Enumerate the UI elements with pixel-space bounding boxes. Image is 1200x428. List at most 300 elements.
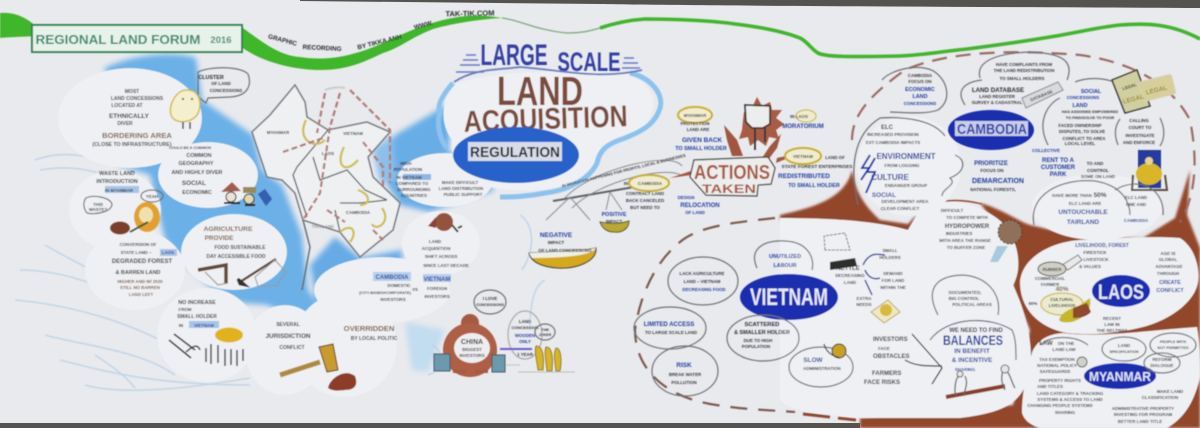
text: hydropower competition: TO BUFFER ZONE	[947, 245, 985, 250]
credit line: TAK-TIK.COM	[445, 9, 495, 18]
text: land reform notes: INVESTING FOR PROGRAM	[1114, 412, 1172, 417]
bubble: land database: DATABASE	[1029, 89, 1053, 102]
panel: laos	[1020, 237, 1198, 334]
icon: yellow figures: THE	[541, 327, 549, 332]
green header ribbon	[0, 13, 1200, 70]
icon: nettle kettle and forest: NEEDS	[856, 302, 872, 307]
text: cambodia domestic versus vietnam foreign investors: CAMBODIA	[376, 275, 409, 281]
icon: nettle kettle and forest: EXTRA	[857, 296, 872, 301]
bubble: documented political: POLITICAL AREAS	[952, 302, 992, 307]
text: concessions location: MOST	[125, 89, 139, 95]
text: create conflict: ADVANTAGE	[1155, 264, 1183, 269]
bubble: balances in benefit and incentive sharing: IN BENEFIT	[954, 348, 990, 355]
credit line: RECORDING	[302, 44, 342, 53]
bubble: complaints from land redistribution: TO SMALL HOLDERS	[1000, 76, 1045, 81]
text: cambodia domestic versus vietnam foreign investors: (CITY-BASED/CORPORATE)	[359, 290, 412, 295]
bubble: lack agriculture land: LACK AGRICULTURE	[680, 271, 725, 276]
title banner: regional land forum 2016	[32, 25, 242, 52]
icon: nettle kettle and forest: SMALL	[882, 248, 898, 253]
bubble: environment culture social impacts: INCREASED PROVISION	[867, 132, 919, 137]
bubble: scattered smallholder: SCATTERED	[744, 322, 780, 328]
text: concessions location: LAND CONCESSIONS	[111, 96, 164, 102]
icon: legal book and scroll: LEGAL	[1122, 93, 1145, 106]
text: high population in vietnam: IN VIETNAM	[396, 175, 422, 180]
bubble: limited access: LIMITED ACCESS	[644, 322, 694, 328]
bubble: environment culture social impacts: FROM LOGGING	[885, 163, 920, 168]
note: vietnam: VIETNAM	[793, 154, 813, 159]
note: myanmar: LAND ARE	[687, 127, 709, 132]
text: high population in vietnam	[394, 161, 483, 198]
text: livelihood list: 60%	[1029, 301, 1037, 306]
text: cambodia domestic versus vietnam foreign investors: DOMESTIC	[387, 283, 411, 288]
map: myanmar laos vietnam cambodia: VIETNAM	[343, 131, 363, 136]
callout: land concession wooden: LAND	[519, 319, 531, 324]
bubble: documented political: DOCUMENTED,	[949, 290, 981, 295]
bubble: land law: ON THE	[1058, 341, 1074, 346]
note: cambodia: BUT NEED TO	[630, 205, 660, 210]
bubble: more than 50 percent untouchable: HAVE MORE THAN	[1052, 193, 1092, 198]
text: land reform notes: SHARING	[1055, 410, 1076, 415]
panel: myanmar	[1022, 316, 1200, 428]
bubble: scattered smallholder: POPULATION	[742, 344, 770, 349]
callout: land concession wooden: WOODEN	[515, 333, 535, 338]
note: cambodia: BACK CANCELED	[626, 198, 664, 203]
note: myanmar: MYANMAR	[684, 113, 707, 118]
text: livelihood list: & VALUES	[1079, 264, 1101, 269]
heading: acquisition: ACQUISITION	[463, 100, 628, 139]
text: land reform notes	[1027, 389, 1183, 424]
text: cambodia domestic versus vietnam foreign investors: FOREIGN	[427, 286, 447, 291]
bubble: risk: POLLUTION	[671, 380, 697, 385]
text: land reform notes: MAKE LAND	[1157, 389, 1183, 394]
icon: legal book and scroll	[1112, 70, 1176, 113]
bubble: more than 50 percent untouchable: ELC LAND	[1125, 195, 1147, 200]
heading: large scale	[454, 39, 642, 82]
text: conversion of state land	[112, 242, 177, 297]
text: several jurisdiction: CONFLICT	[279, 345, 305, 351]
heading: large scale: LARGE	[480, 39, 548, 72]
bubble: land law: SAFEGUARDS	[1040, 369, 1070, 374]
bubble: more than 50 percent untouchable: ONE AND	[1126, 202, 1146, 207]
callout: land concession wooden: ONLY	[519, 339, 531, 344]
text: cambodia domestic versus vietnam foreign investors: INVESTORS	[380, 297, 406, 302]
negative impact pan: OF LAND CONCESSIONS	[538, 248, 592, 253]
text: cambodia domestic versus vietnam foreign investors: VS	[412, 287, 418, 292]
text: land reform notes: CLASSIFICATION	[1142, 395, 1178, 400]
note: cambodia: CONTRACT LAND	[626, 191, 664, 196]
text: land reform notes: LAND CATEGORY & TRACKING	[1037, 391, 1104, 396]
note: laos: MORATORIUM	[782, 124, 824, 130]
bubble: environment culture social impacts: DEVELOPMENT AREA	[882, 199, 929, 204]
bubble: slow administration: ADMINISTRATION	[803, 366, 841, 371]
callout: land concession wooden: 1 YEAR	[517, 352, 534, 357]
bubble: social land concessions: TO FIND/SOLVE TO POOR	[1066, 115, 1114, 120]
icon: yellow figures: JOKER	[539, 333, 552, 337]
balance scale: negative vs positive impact	[529, 153, 686, 268]
map: myanmar laos vietnam cambodia: MYANMAR	[267, 130, 290, 135]
callout: cluster of land concessions	[198, 68, 249, 103]
icon: food bowl: LIVELIHOOD	[1049, 303, 1075, 308]
text: land reform notes: BETTER LAND TITLE	[1118, 419, 1162, 424]
note: laos: IN LAOS	[790, 114, 808, 119]
note: vietnam	[778, 148, 853, 189]
text: cambodia domestic versus vietnam foreign investors: INVESTORS	[424, 294, 450, 299]
bubble: economic land concessions: FOCUS ON	[908, 79, 932, 84]
badge: vietnam: VIETNAM	[750, 284, 828, 311]
bubble: land database: LAND DATABASE	[972, 87, 1024, 94]
positive impact pan	[600, 212, 629, 232]
bubble: balances in benefit and incentive sharing	[930, 321, 1016, 397]
icon: figure at desk	[1132, 150, 1167, 190]
text and icon: no increase for smallholders: VIETNAM	[194, 323, 214, 328]
white idea bubbles over blue wash	[58, 68, 653, 397]
text: conversion of state land: & BARREN LAND	[116, 270, 161, 276]
bubble: more than 50 percent untouchable: ELC LAND ARE	[1069, 201, 1101, 206]
text: investors and farmers: FACE RISKS	[864, 380, 900, 386]
text: prioritize demarcation	[970, 161, 1024, 192]
text: conversion of state land: DEGRADED FOREST	[112, 259, 172, 265]
map: myanmar laos vietnam cambodia: THAILAND	[312, 224, 334, 229]
icon: nettle kettle and forest	[824, 233, 906, 323]
text: concessions location	[92, 89, 172, 148]
text: livelihood list: COMMERCIAL	[1035, 276, 1065, 281]
bubble: land law: PROPERTY RIGHTS	[1039, 378, 1081, 383]
callout: land concession wooden: CONCESSION	[512, 325, 539, 330]
title banner: regional land forum 2016: REGIONAL LAND FORUM	[36, 32, 201, 47]
text: prioritize demarcation: NATIONAL FORESTS,	[970, 187, 1016, 192]
text: create conflict: CONFLICT	[1156, 288, 1184, 294]
text: high population in vietnam: MAKE DIFFICULT	[442, 180, 479, 185]
bubble: unutilized labour: UNUTILIZED	[769, 254, 801, 260]
bubble: unutilized labour: LABOUR	[773, 263, 797, 269]
text: rent to a customer park: PARK	[1050, 172, 1067, 178]
text and icon: agriculture	[198, 226, 286, 286]
note: vietnam: TO SMALL HOLDER	[788, 183, 840, 189]
bubble: social land concessions: HAS ASSIGNED EMPOWERED	[1062, 109, 1118, 114]
text: concessions location: LOCATED AT	[111, 103, 143, 109]
text: create conflict: GLOBAL	[1159, 257, 1178, 262]
bubble: social land concessions: LAND	[1073, 103, 1088, 109]
icon: china figure: INVESTORS	[459, 353, 485, 358]
bubble: people with no land: PEOPLE WITH	[1160, 340, 1186, 344]
icon: legal book and scroll: LEGAL	[1122, 82, 1138, 91]
bubble: people with no land: NOT PERMITTED	[1157, 346, 1189, 350]
text: conversion of state land: CONVERSION OF	[120, 242, 157, 247]
bubble: environment culture social impacts: ENVIRONMENT	[876, 152, 936, 161]
text: concessions location: BORDERING AREA	[102, 131, 172, 140]
callout: land concession wooden	[500, 311, 542, 359]
title banner: regional land forum 2016: 2016	[210, 35, 232, 46]
text: livelihood list: FIRESTICK	[1083, 250, 1107, 255]
map: myanmar laos vietnam cambodia: LAOS	[322, 151, 334, 156]
map: myanmar laos vietnam cambodia: CAMBODIA	[346, 210, 371, 215]
text: rent to a customer park: CONTROL	[1087, 168, 1109, 173]
bubble: economic land concessions	[882, 67, 947, 113]
bubble: environment culture social impacts: ELC	[881, 125, 894, 131]
bubble: more than 50 percent untouchable	[1033, 181, 1163, 226]
text: rent to a customer park: SOME ON LAND	[1081, 174, 1115, 179]
text: concessions location: (CLOSE TO INFRASTRUCTURE)	[92, 142, 172, 148]
bubble: risk	[652, 346, 718, 396]
bubble: land specification: LAND	[1118, 343, 1130, 348]
bubble: land law: LAND LAW	[1052, 347, 1076, 352]
text and icon: land acquisition shift: SINCE LAST DECADE	[423, 263, 469, 268]
balance scale: negative vs positive impact: IN MIGRATION HAPPENING FOR PROFITS, LOCAL & BUSINESSES	[561, 153, 686, 188]
text and icon: no increase for smallholders: IN	[179, 323, 183, 328]
text: high population in vietnam: PUBLIC SUPPORT	[444, 192, 483, 197]
badge: myanmar: MYANMAR	[1089, 369, 1152, 384]
text and icon: land acquisition shift: LAND	[429, 239, 441, 244]
bubble: people with no land: REFORM	[1152, 357, 1172, 362]
text: waste land: WASTE?	[89, 207, 107, 212]
actions taken hub	[624, 97, 853, 215]
icon: nettle kettle and forest: DEMAND	[883, 271, 903, 276]
text: several jurisdiction: SEVERAL	[276, 322, 300, 328]
note: vietnam: STATE FOREST ENTERPRISES	[782, 164, 853, 170]
text and icon: agriculture: FOOD SUSTAINABLE	[214, 245, 266, 251]
note: cambodia: DESIGN	[678, 195, 694, 200]
bubble: calling court	[1115, 118, 1164, 146]
text: hydropower competition: INDUSTRIES	[946, 231, 972, 236]
text: create conflict: THROUGH	[1157, 271, 1179, 276]
text: rent to a customer park: CUSTOMER	[1041, 165, 1076, 171]
text: livelihood list: RUBBER	[1043, 267, 1062, 272]
bubble: environment culture social impacts	[854, 118, 963, 211]
bubble: social land concessions: SOCIAL	[1081, 89, 1102, 95]
bubble: limited access: TO LARGE SCALE LAND	[645, 330, 697, 335]
bubble: social land concessions	[1043, 79, 1122, 146]
bubble: lack agriculture land: DECREASING FOOD	[682, 287, 726, 292]
bubble: economic land concessions: ECONOMIC	[905, 87, 935, 93]
icon: yellow figures	[518, 324, 575, 372]
text: recent law: THE BELTWAY	[1097, 328, 1127, 333]
badge: regulation: REGULATION	[470, 144, 560, 161]
text: livelihood list: LIVESTOCK	[1083, 257, 1109, 262]
icon: nettle kettle and forest: NETTLE	[836, 266, 860, 272]
text and icon: land acquisition shift	[422, 213, 469, 268]
text: land reform notes: CHANGING PEOPLE SYSTEMS	[1027, 403, 1093, 408]
callout: cluster of land concessions: CONCESSIONS	[210, 88, 242, 93]
title halo	[438, 73, 661, 197]
note: cambodia: RELOCATION	[680, 203, 720, 209]
brown wash behind country panels	[780, 170, 1200, 428]
bubble: environment culture social impacts: ENDANGER GROUP	[885, 183, 927, 188]
bubble: calling court: COURT TO	[1129, 125, 1152, 130]
negative impact pan: IMPACT	[548, 240, 565, 245]
bubble: scattered smallholder: DUE TO HIGH	[744, 338, 772, 343]
bubble: social land concessions: FACED OWNERSHIP	[1058, 123, 1102, 128]
bubble: complaints from land redistribution	[979, 52, 1069, 81]
text: waste land: WASTE LAND	[99, 171, 135, 177]
bubble: scattered smallholder	[727, 315, 799, 361]
text: prioritize demarcation: FOCUS ON	[980, 168, 1004, 173]
bubble: limited access	[634, 307, 706, 349]
text: several jurisdiction: JURISDICTION	[265, 333, 311, 340]
badge: cambodia	[948, 110, 1034, 150]
positive impact pan: IMPACT	[606, 219, 623, 224]
text: investors and farmers	[864, 334, 942, 386]
text: recent law: LAW IN	[1104, 322, 1120, 327]
icon: nettle kettle and forest: WITHIN THE	[880, 285, 906, 290]
bubble: lack agriculture land: LAND – VIETNAM	[684, 279, 721, 284]
bubble: risk: BREAK WATER	[669, 372, 702, 377]
text: hydropower competition: HYDROPOWER	[945, 224, 990, 230]
bubble: land law: NATIONAL POLICY	[1037, 363, 1077, 368]
note: cambodia: IN	[624, 181, 628, 186]
bubble: scattered smallholder: & SMALLER HOLDER	[734, 330, 790, 336]
arrows out from actions	[670, 125, 800, 178]
text: livelihood list: 40%	[1056, 286, 1069, 293]
text: high population in vietnam: SURROUNDING	[397, 187, 431, 192]
bubble: slow administration: SLOW	[803, 357, 824, 364]
text and icon: no increase for smallholders	[169, 300, 243, 366]
bubble: balances in benefit and incentive sharing: BALANCES	[943, 332, 1003, 348]
bubble: environment culture social impacts: CULTURE	[871, 173, 909, 182]
bubble: land database	[961, 80, 1063, 108]
badge: regulation	[453, 127, 579, 183]
bubble: complaints from land redistribution: HAVE COMPLAINTS FROM	[996, 62, 1052, 67]
text: common geography: ECONOMIC	[182, 190, 212, 196]
text: prioritize demarcation: PRIORITIZE	[974, 161, 1008, 167]
bubble: social land concessions: LOCAL LEVEL	[1065, 141, 1096, 146]
bubble: unutilized labour	[755, 241, 813, 270]
bubble: people with no land	[1144, 333, 1196, 373]
text: common geography: AND HIGHLY DIVER	[172, 170, 223, 176]
bubble: more than 50 percent untouchable: 50%	[1094, 192, 1107, 199]
text: waste land: THIS	[93, 202, 103, 207]
note: laos	[782, 110, 824, 130]
bubble: balances in benefit and incentive sharing: WE NEED TO FIND	[949, 328, 1003, 334]
note: myanmar	[675, 107, 727, 152]
icon: people	[221, 182, 272, 206]
panel: vietnam	[634, 201, 1031, 420]
text: hydropower competition: TO COMPETE WITH	[946, 215, 988, 220]
icon: china figure	[433, 314, 520, 377]
text and icon: agriculture: DAY ACCESSIBLE FOOD	[206, 254, 266, 260]
badge: cambodia: CAMBODIA	[957, 121, 1027, 138]
bubble: complaints from land redistribution: THE LAND REDISTRIBUTION	[994, 68, 1054, 73]
text: land reform notes: ADMINISTRATIVE PROPERTY	[1112, 406, 1174, 411]
text: common geography: SOCIAL	[182, 180, 206, 187]
badge: actions taken	[690, 157, 775, 196]
bubble: risk: RISK	[676, 362, 692, 369]
icon: nettle kettle and forest: DECREASING	[835, 273, 865, 278]
bubble: land specification: SPECIFICATION	[1109, 350, 1139, 354]
text: investors and farmers: FARMERS	[872, 371, 901, 377]
text and icon: no increase for smallholders: FROM	[179, 307, 192, 312]
bubble: land specification	[1102, 337, 1146, 361]
positive impact pan: POSITIVE	[602, 212, 627, 218]
bubble: economic land concessions: CONCESSIONS	[904, 101, 936, 106]
bubble: economic land concessions: LAND	[913, 94, 928, 100]
callout: china speech bubble	[474, 290, 506, 314]
text: overridden by local politic: BY LOCAL POLITIC	[351, 336, 398, 342]
credit line: BY TIKKA ANH	[357, 34, 403, 51]
text: hydropower competition	[939, 208, 1022, 262]
text: high population in vietnam: COUNTRIES	[401, 193, 427, 198]
bubble: environment culture social impacts: SOCIAL	[872, 192, 896, 199]
text: cambodia domestic versus vietnam foreign investors	[359, 272, 451, 302]
note: vietnam: LAND OF	[825, 155, 845, 160]
note: myanmar: GIVEN BACK	[682, 137, 722, 144]
badge: actions taken: TAKEN	[702, 182, 756, 196]
text: rent to a customer park	[1032, 148, 1115, 179]
bubble: calling court: AND ENFORCE	[1123, 140, 1155, 145]
note: myanmar: PROTECTION	[681, 121, 709, 126]
bubble: land law: AND TITLES	[1037, 384, 1063, 389]
text: land reform notes: SYSTEMS & ACCESS TO LAND	[1037, 397, 1103, 402]
panel: left context	[84, 68, 398, 391]
text: create conflict	[1155, 251, 1184, 294]
icon: legal book and scroll: LEGAL	[1145, 85, 1168, 97]
text: conversion of state land: HIGHER AND W/ 2020	[117, 279, 163, 284]
badge: vietnam	[740, 274, 838, 320]
text: livelihood list: FARMER	[1041, 282, 1060, 287]
bubble: more than 50 percent untouchable: UNTOUCHABLE	[1058, 209, 1108, 216]
callout: cluster of land concessions: CLUSTER	[198, 75, 224, 81]
main title: large scale land acquisition regulation	[438, 39, 661, 197]
callout: china speech bubble: I LOVE	[483, 296, 497, 301]
credit line: GRAPHIC	[267, 33, 298, 48]
icon: nettle kettle and forest: HOLDERS	[879, 255, 901, 260]
bubble: balances in benefit and incentive sharing: SHARING	[955, 367, 976, 372]
text: high population in vietnam: COMPARED TO	[396, 181, 429, 186]
text: overridden by local politic	[344, 324, 398, 342]
text: overridden by local politic: OVERRIDDEN	[344, 324, 394, 333]
icon: china figure: CHINA	[461, 339, 483, 346]
icon: china figure: BIGGEST	[462, 347, 482, 352]
text: livelihood list: LIVELIHOOD, FOREST	[1075, 243, 1129, 249]
text: waste land: IN MYANMAR	[105, 188, 134, 193]
text: concessions location: ETHNICALLY	[109, 113, 150, 120]
negative impact pan: NEGATIVE	[540, 232, 573, 239]
bubble: more than 50 percent untouchable: CAMBODIA	[1124, 218, 1149, 223]
bubble: land database: SURVEY & CADASTRAL	[972, 100, 1023, 105]
text and icon: land acquisition shift: SHIFT ACROSS	[425, 254, 457, 259]
bubble: land law: TAX EXEMPTION	[1039, 357, 1075, 362]
text: investors and farmers: FACE	[878, 346, 890, 351]
text: create conflict: AGE IS	[1161, 251, 1176, 256]
text: hydropower competition: DIFFICULT	[941, 208, 963, 213]
bubble: people with no land: DIALOGUE	[1150, 363, 1174, 368]
text and icon: no increase for smallholders: SMALL HOLDER	[177, 314, 217, 320]
text: recent law	[1097, 316, 1127, 333]
icon: waste land figure	[110, 202, 160, 234]
bubble: calling court: CALLING	[1129, 118, 1149, 123]
text: prioritize demarcation: DEMARCATION	[972, 178, 1024, 185]
bubble: land law	[1037, 338, 1088, 389]
text: high population in vietnam: POPULATION	[394, 167, 422, 172]
bubble: slow administration	[789, 344, 853, 387]
icon: food bowl: CULTURAL	[1050, 297, 1074, 302]
text: common geography	[169, 146, 223, 196]
text: rent to a customer park: RENT TO A	[1042, 158, 1075, 164]
text: create conflict: CREATE	[1159, 280, 1181, 286]
icon: raised fist	[739, 97, 784, 150]
icon: nettle kettle and forest: LAND	[844, 280, 856, 285]
text: concessions location: DIVER	[117, 121, 133, 127]
text: common geography: GEOGRAPHY	[178, 161, 214, 167]
text: rent to a customer park: TO AND	[1087, 161, 1103, 166]
background streaks: light blue sketch lines	[15, 155, 545, 390]
bubble: calling court: INVESTIGATE	[1126, 133, 1155, 138]
bubble: environment culture social impacts: EXT CAMBODIA IMPACTS	[866, 140, 920, 145]
map: myanmar laos vietnam cambodia	[252, 85, 400, 290]
note: cambodia: CAMBODIA	[638, 181, 663, 186]
text: hydropower competition: WITH AREA THE RANGE	[939, 238, 991, 243]
text: livelihood list	[1029, 243, 1129, 306]
panel: cambodia	[852, 52, 1195, 240]
